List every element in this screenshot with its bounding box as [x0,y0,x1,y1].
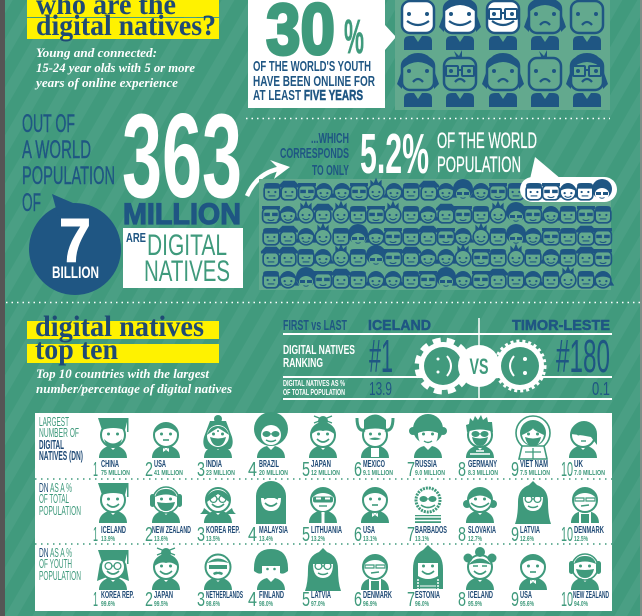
stat: 363 million are digital natives: ARE [126,230,146,245]
row: largest number of digital natives: MEXICO [363,459,385,470]
row: largest number of digital natives: BRAZIL [259,459,279,470]
stat: 363 million are digital natives: NATIVES [144,255,230,288]
dotted dividers [6,118,640,302]
row: DN as percent of youth population: 96.9% [363,601,378,608]
table: first vs last: DIGITAL NATIVES [283,342,355,357]
text: which corresponds to only 5.2% of the world population: TO ONLY [312,162,349,179]
row: largest number of digital natives: RUSSIA [415,459,437,470]
row: largest number of digital natives: 5 [302,459,310,481]
row: DN as percent of total population: LITHUANIA [311,525,342,536]
row: DN as percent of total population: DENMARK [574,525,604,536]
table: first vs last: ICELAND [368,317,431,334]
row: DN as percent of youth population: 3 [197,589,205,611]
table: first vs last: TIMOR-LESTE [512,317,610,334]
row: DN as percent of total population: 2 [145,524,153,546]
stat: 363 million are digital natives [122,89,243,288]
row: DN as percent of youth population: 99.5% [154,601,169,608]
panel: ten youth faces, three online [395,0,610,110]
row: DN as percent of youth population: USA [520,590,532,601]
row: DN as percent of total population: USA [363,525,375,536]
callout: white pill of highlighted faces [520,157,617,202]
row: DN as percent of total population: 7 [407,524,415,546]
heading: digital natives top ten: digital natives [35,310,204,343]
row: largest number of digital natives: VIET NAM [520,459,548,470]
stat: 363 million are digital natives: DIGITAL [147,229,227,262]
panel: 30 percent callout: HAVE BEEN ONLINE FOR [253,73,375,90]
row: DN as percent of total population: 9 [511,524,519,546]
row: DN as percent of youth population: KOREA REP. [101,590,134,601]
intro text: years of online experience [34,75,178,90]
row: DN as percent of youth population: POPULATION [39,568,81,583]
row: largest number of digital natives: 41 MILLION [154,470,183,477]
row: DN as percent of total population: BARBADOS [415,525,447,536]
row: largest number of digital natives: USA [154,459,166,470]
row: largest number of digital natives: 8.3 MILLION [468,470,498,477]
text: out of a world population of: A WORLD [22,136,91,164]
row: largest number of digital natives: CHINA [101,459,119,470]
row: DN as percent of total population: 12.7% [468,536,483,543]
row: DN as percent of youth population: 1 [93,589,98,611]
row: DN as percent of total population: 6 [354,524,362,546]
row: DN as percent of total population: 13.4% [259,536,274,543]
text: out of a world population of: OF [22,189,41,217]
heading: digital natives top ten [27,310,219,366]
row: DN as percent of youth population [39,545,609,611]
panel: 30 percent callout: % [344,11,364,64]
text: which corresponds to only 5.2% of the world population: POPULATION [437,152,521,177]
row: largest number of digital natives: 23 MILLION [206,470,235,477]
row: DN as percent of youth population: 95.9% [468,601,483,608]
row: DN as percent of total population: 4 [248,524,257,546]
text: which corresponds to only 5.2% of the world population: ...WHICH [311,130,349,147]
bubble: 7 billion: 7 [59,207,91,276]
row: DN as percent of total population: DN AS A % [39,480,72,495]
bubble: 7 billion [29,194,121,295]
row: DN as percent of total population: POPULATION [39,503,81,518]
row: DN as percent of total population: 1 [93,524,98,546]
icon: versus faces: VS [470,354,488,379]
row: DN as percent of youth population: OF YOUTH [39,556,72,571]
table: first vs last [283,317,612,399]
stat: 363 million are digital natives: MILLION [123,198,241,231]
row: DN as percent of youth population: 2 [145,589,153,611]
table: first vs last: 0.1 [592,379,610,399]
row: DN as percent of total population: 12.5% [574,536,589,543]
row: largest number of digital natives: 8 [458,459,466,481]
row: largest number of digital natives: 10 [561,459,573,481]
row: largest number of digital natives: INDIA [206,459,222,470]
row: DN as percent of youth population: NETHERLANDS [206,590,243,601]
text: which corresponds to only 5.2% of the world population: OF THE WORLD [437,128,537,153]
row: DN as percent of total population: 13.6% [154,536,169,543]
text: top ten subtitle: number/percentage of digital natives [36,381,232,396]
intro text: 15-24 year olds with 5 or more [36,60,195,75]
row: DN as percent of total population: 13.1% [363,536,378,543]
row: DN as percent of total population: 13.5% [206,536,221,543]
row: DN as percent of youth population: 98.0% [259,601,274,608]
row: DN as percent of youth population: DN AS A % [39,545,72,560]
row: DN as percent of total population: 13.2% [311,536,326,543]
row: largest number of digital natives: 9 [511,459,519,481]
row: DN as percent of total population: 10 [561,524,573,546]
row: largest number of digital natives: DIGITAL [39,437,64,452]
row: largest number of digital natives: UK [574,459,583,470]
table: first vs last: DIGITAL NATIVES AS % [283,378,345,388]
row: largest number of digital natives: LARGEST [39,414,69,429]
row: largest number of digital natives: NUMBER OF [39,425,79,440]
row: DN as percent of youth population: 6 [354,589,362,611]
row: largest number of digital natives: 7.5 MILLION [520,470,550,477]
row: largest number of digital natives: 7.0 MILLION [574,470,605,477]
row: DN as percent of youth population: 99.6% [101,601,116,608]
row: DN as percent of total population: NEW ZEALAND [152,525,191,536]
row: DN as percent of youth population: 8 [458,589,466,611]
row: DN as percent of total population: 13.1% [415,536,430,543]
row: largest number of digital natives: 9.0 MILLION [415,470,445,477]
panel: 30 percent callout [248,0,396,108]
row: largest number of digital natives: 3 [197,459,205,481]
table: first vs last: FIRST vs LAST [283,317,347,334]
text: which corresponds to only 5.2% of the world population: 5.2% [360,122,429,186]
row: DN as percent of youth population: 97.0% [311,601,326,608]
row: largest number of digital natives: 12 MILLION [311,470,340,477]
text: out of a world population of: OUT OF [22,110,75,138]
panel: crowd of small faces [259,177,614,290]
row: DN as percent of youth population: 7 [407,589,415,611]
stat: 363 million are digital natives: 363 [122,89,242,223]
icon: versus faces [417,340,545,392]
row: DN as percent of youth population: 96.0% [415,601,430,608]
row: largest number of digital natives: 75 MILLION [101,470,130,477]
row: DN as percent of youth population: 9 [511,589,519,611]
row: DN as percent of total population: 3 [197,524,205,546]
row: largest number of digital natives [39,412,605,481]
row: DN as percent of youth population: LATVIA [311,590,331,601]
row: DN as percent of total population: OF TOTAL [39,491,69,506]
row: largest number of digital natives: 4 [248,459,257,481]
row: DN as percent of total population: 8 [458,524,466,546]
table: first vs last: RANKING [283,355,323,370]
row: DN as percent of youth population: ICELAND [468,590,493,601]
panel: 30 percent callout: OF THE WORLD'S YOUTH [253,58,371,75]
intro text: Young and connected: [36,45,157,60]
row: largest number of digital natives: NATIVES (DN) [39,448,83,463]
row: DN as percent of total population: 5 [302,524,310,546]
row: DN as percent of youth population: 5 [302,589,310,611]
row: DN as percent of total population [39,480,604,546]
arrow [247,160,290,196]
panel: top ten table [35,412,612,611]
row: DN as percent of total population: SLOVAKIA [468,525,496,536]
table: first vs last: OF TOTAL POPULATION [283,387,345,397]
table: first vs last: #1 [369,330,393,382]
row: DN as percent of youth population: JAPAN [154,590,173,601]
row: DN as percent of total population: 12.6% [520,536,535,543]
text: which corresponds to only 5.2% of the world population: CORRESPONDS [280,145,349,162]
text: top ten subtitle [36,366,232,396]
text: out of a world population of: POPULATION [22,162,115,190]
row: DN as percent of total population: LATVIA [520,525,540,536]
row: largest number of digital natives: GERMANY [468,459,497,470]
row: DN as percent of total population: MALAYSIA [259,525,288,536]
row: largest number of digital natives: 6 [354,459,362,481]
row: DN as percent of youth population: 10 [561,589,573,611]
row: DN as percent of youth population: 94.0% [574,601,589,608]
row: DN as percent of total population: ICELAND [101,525,126,536]
text: which corresponds to only 5.2% of the world population [280,122,537,186]
panel: 30 percent callout: AT LEAST FIVE YEARS [253,87,363,104]
row: DN as percent of youth population: ESTONIA [415,590,440,601]
row: DN as percent of youth population: 4 [248,589,257,611]
row: DN as percent of total population: 13.9% [101,536,116,543]
row: DN as percent of youth population: 95.6% [520,601,535,608]
row: DN as percent of youth population: DENMARK [363,590,392,601]
row: largest number of digital natives: JAPAN [311,459,331,470]
intro text [34,45,195,90]
heading: who are the digital natives: digital natives? [36,9,216,42]
row: largest number of digital natives: 7 [407,459,415,481]
row: largest number of digital natives: 20 MILLION [259,470,288,477]
row: largest number of digital natives: 1 [93,459,98,481]
text: top ten subtitle: Top 10 countries with the largest [36,366,209,381]
row: DN as percent of total population: KOREA REP. [206,525,240,536]
heading: digital natives top ten: top ten [35,333,118,366]
row: largest number of digital natives: 9.1 MILLION [363,470,393,477]
row: DN as percent of youth population: FINLAND [259,590,284,601]
text: out of a world population of [22,110,115,217]
row: DN as percent of youth population: 98.6% [206,601,221,608]
bubble: 7 billion: BILLION [52,263,99,282]
row: largest number of digital natives: 2 [145,459,153,481]
table: first vs last: 13.9 [369,379,392,399]
